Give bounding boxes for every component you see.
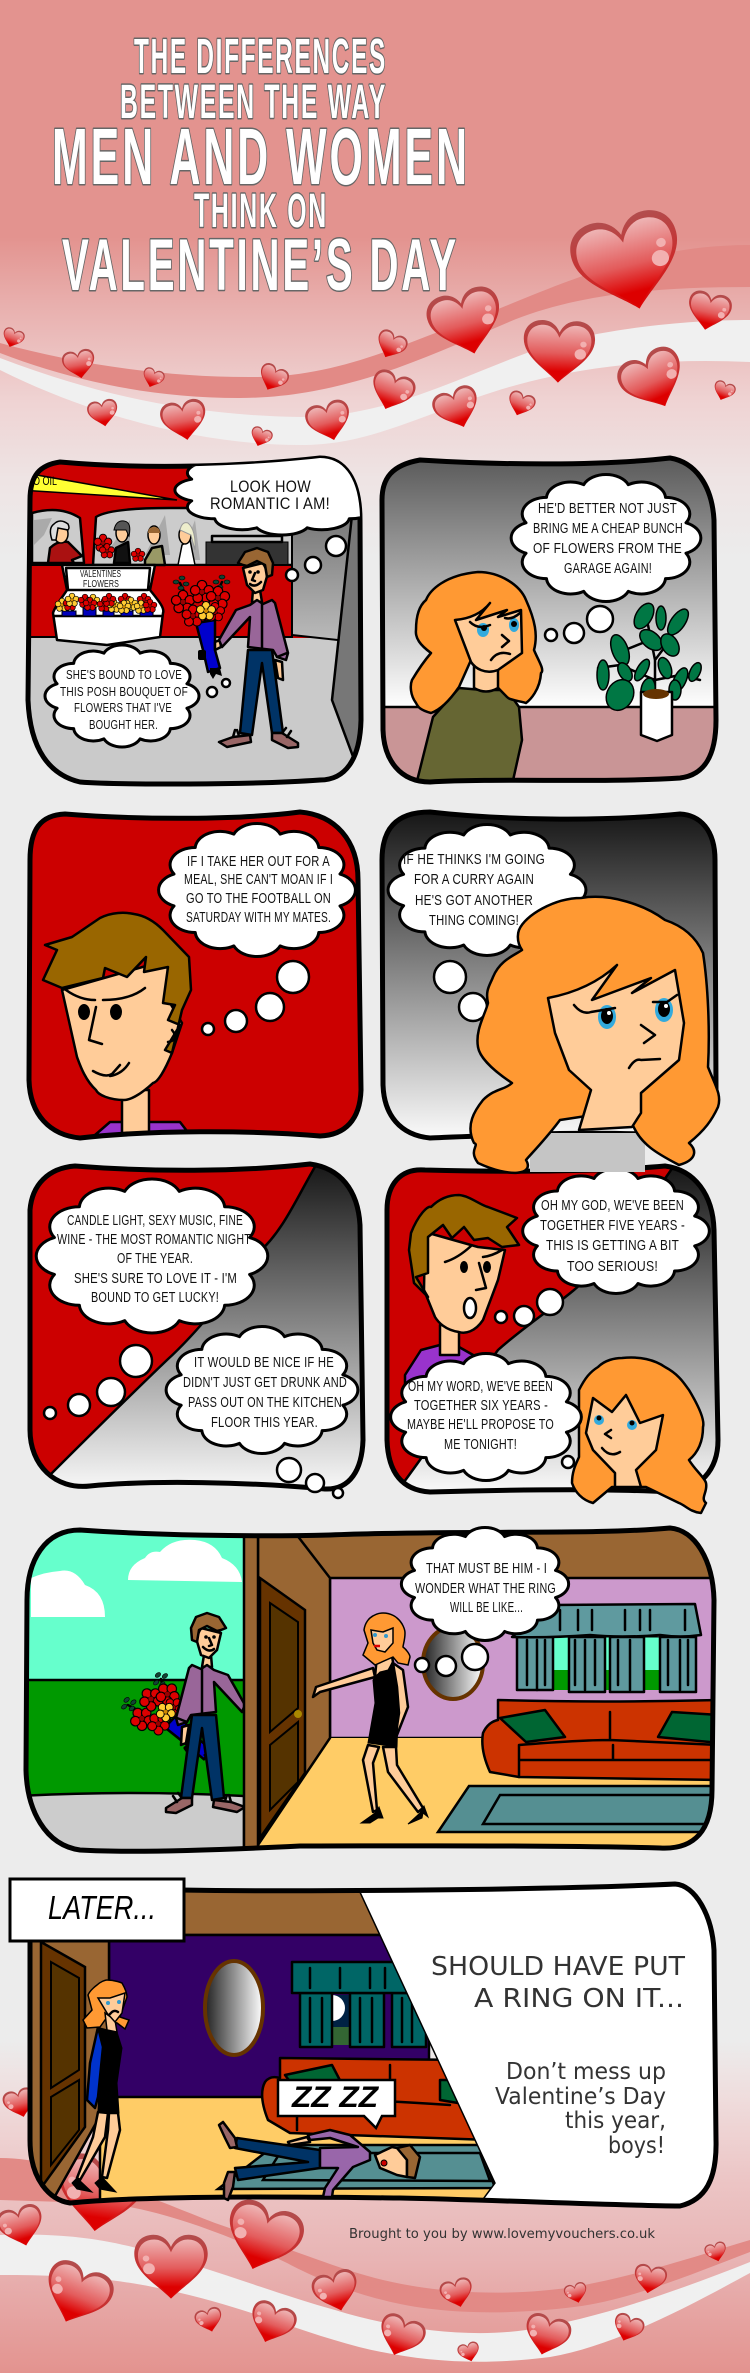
thought text: propose xyxy=(407,1378,554,1453)
thought text: propose: TOGETHER SIX YEARS - xyxy=(414,1397,548,1414)
title xyxy=(52,30,470,306)
bouquet behind back xyxy=(121,1672,206,1761)
thought text: candle light: BOUND TO GET LUCKY! xyxy=(91,1289,219,1306)
heading: should have put a ring on it: SHOULD HAVE PUT xyxy=(431,1952,685,1982)
icon: heart xyxy=(711,379,737,404)
thought text: the ring: THAT MUST BE HIM - I xyxy=(426,1560,547,1577)
panel 1: florist at the garage: O OIL xyxy=(33,474,57,488)
bouquet xyxy=(171,575,230,679)
icon: heart xyxy=(438,2275,476,2311)
title: THE DIFFERENCES xyxy=(134,30,387,84)
sleeping man xyxy=(219,2122,420,2200)
gray backdrop below neck xyxy=(530,1133,645,1172)
icon: heart xyxy=(632,2263,668,2296)
icon: heart xyxy=(140,366,166,391)
later caption box: LATER... xyxy=(48,1889,156,1926)
panel 1: florist at the garage xyxy=(26,456,364,786)
icon: heart xyxy=(134,2235,208,2299)
icon: heart xyxy=(563,2281,590,2306)
thought text: bound to love: BOUGHT HER. xyxy=(89,717,158,732)
thought text: propose: MAYBE HE'LL PROPOSE TO xyxy=(407,1416,554,1433)
panel 3 frame xyxy=(29,812,361,1138)
icon: heart xyxy=(254,361,291,396)
zz zz speech bubble xyxy=(278,2080,395,2128)
thought bubbles xyxy=(207,536,346,697)
thought text: propose: OH MY WORD, WE'VE BEEN xyxy=(408,1378,553,1395)
thought text: curry: IF HE THINKS I'M GOING xyxy=(403,851,545,868)
thought text: too serious: TOGETHER FIVE YEARS - xyxy=(540,1217,685,1234)
woman in shop window xyxy=(48,521,82,563)
heading: should have put a ring on it xyxy=(431,1952,685,2014)
text: don't mess up valentine's day: this year, xyxy=(565,2108,666,2134)
room xyxy=(32,1892,490,2198)
thought text: candle light: OF THE YEAR. xyxy=(117,1250,193,1267)
room walls and floor xyxy=(256,1525,720,1850)
panel 3: man thinking about football xyxy=(20,805,370,1145)
icon: heart xyxy=(248,425,274,450)
woman big head xyxy=(470,897,719,1173)
woman in black dress xyxy=(313,1613,428,1824)
thought text: football: MEAL, SHE CAN'T MOAN IF I xyxy=(184,871,333,888)
panel 6 frame xyxy=(387,1166,718,1492)
panel 5 frame xyxy=(30,1164,363,1489)
thought text: too serious: OH MY GOD, WE'VE BEEN xyxy=(541,1197,684,1214)
thought text: kitchen floor: FLOOR THIS YEAR. xyxy=(211,1414,318,1431)
icon: large heart xyxy=(564,204,692,322)
thought text: candle light: WINE - THE MOST ROMANTIC NIGHT xyxy=(57,1231,251,1248)
flower display stand: VALENTINES xyxy=(80,569,121,580)
rug xyxy=(438,1786,720,1832)
top hearts xyxy=(0,204,737,450)
thought text: cheap flowers: BRING ME A CHEAP BUNCH xyxy=(533,520,683,537)
icon: heart xyxy=(456,2340,482,2364)
thought text: the ring: WONDER WHAT THE RING xyxy=(415,1580,556,1597)
woman hopeful xyxy=(572,1357,706,1513)
thought text: cheap flowers: OF FLOWERS FROM THE xyxy=(533,540,682,557)
thought text: candle light xyxy=(57,1212,251,1306)
thought text: football: IF I TAKE HER OUT FOR A xyxy=(187,853,330,870)
thought text: propose: ME TONIGHT! xyxy=(444,1436,517,1453)
thought cloud: cheap flowers xyxy=(511,474,701,602)
icon: heart xyxy=(35,2255,119,2334)
icon: heart xyxy=(520,2310,574,2360)
panel 6: together five and six years xyxy=(380,1160,725,1513)
panel 4: woman thinking about curry xyxy=(375,805,725,1173)
woman hair and face xyxy=(411,572,542,713)
later caption box xyxy=(10,1879,184,1941)
thought bubbles xyxy=(434,961,487,1021)
top wave bands xyxy=(0,245,750,445)
thought bubbles xyxy=(44,1345,343,1498)
thought text: kitchen floor xyxy=(183,1354,347,1431)
icon: small heart behind panel xyxy=(1,2085,39,2121)
title: BETWEEN THE WAY xyxy=(120,76,387,129)
thought text: football: SATURDAY WITH MY MATES. xyxy=(186,909,331,926)
icon: heart xyxy=(612,341,695,420)
panel 8: later, man passed out xyxy=(10,1879,730,2215)
thought text: bound to love xyxy=(60,667,188,732)
thought text: cheap flowers: GARAGE AGAIN! xyxy=(564,560,652,577)
icon: heart xyxy=(217,2195,309,2281)
panel 7: woman answers door xyxy=(20,1525,720,1860)
man with bouquet xyxy=(215,548,298,748)
sofa xyxy=(482,1700,720,1780)
text: don't mess up valentine's day: Don’t mess up xyxy=(506,2059,666,2085)
thought bubbles xyxy=(495,1289,574,1468)
panel 2: woman and plant xyxy=(375,450,725,792)
text: don't mess up valentine's day: boys! xyxy=(608,2133,665,2159)
icon: heart xyxy=(0,2201,48,2251)
icon: heart xyxy=(303,397,355,446)
speech text: look how romantic: ROMANTIC I AM! xyxy=(210,494,330,513)
man head xyxy=(43,913,191,1100)
thought cloud: football xyxy=(159,824,355,956)
man head worried xyxy=(409,1195,519,1333)
icon: heart xyxy=(193,2305,225,2335)
panel 4 frame xyxy=(382,812,716,1138)
icon: heart xyxy=(504,389,538,420)
icon: heart xyxy=(703,2240,729,2264)
thought text: football xyxy=(184,853,333,926)
thought text: bound to love: SHE'S BOUND TO LOVE xyxy=(66,667,182,682)
text: don't mess up valentine's day: Valentine’s Day xyxy=(495,2084,666,2110)
rug xyxy=(218,2145,495,2189)
panel 7 frame xyxy=(26,1528,714,1851)
white clouds in the sky xyxy=(31,1540,242,1617)
thought text: curry: HE'S GOT ANOTHER xyxy=(415,892,533,909)
thought cloud: the ring xyxy=(401,1528,569,1640)
icon: heart xyxy=(372,327,410,364)
icon: heart xyxy=(522,319,596,384)
thought text: candle light: CANDLE LIGHT, SEXY MUSIC, FINE xyxy=(67,1212,243,1229)
icon: heart xyxy=(309,2266,363,2316)
icon: heart xyxy=(609,2311,647,2346)
icon: heart xyxy=(429,382,485,435)
thought cloud: candle light xyxy=(36,1179,268,1333)
thought text: the ring xyxy=(415,1560,556,1616)
thought cloud: look how romantic xyxy=(173,458,360,536)
flower display stand: FLOWERS xyxy=(83,579,119,590)
woman arms crossed xyxy=(72,1980,129,2192)
icon: heart xyxy=(373,2310,429,2363)
text: don't mess up valentine's day xyxy=(495,2059,666,2159)
white caption area xyxy=(359,1885,730,2215)
window and curtains xyxy=(292,1962,426,2047)
thought text: football: GO TO THE FOOTBALL ON xyxy=(186,890,331,907)
panel 1 frame xyxy=(28,458,361,784)
thought cloud: too serious xyxy=(523,1168,709,1294)
mirror xyxy=(423,1627,483,1699)
title: THINK ON xyxy=(194,185,328,238)
icon: heart xyxy=(244,2297,300,2350)
panel 2 frame xyxy=(382,458,716,782)
panel 8 frame xyxy=(30,1884,716,2206)
icon: heart xyxy=(365,366,419,416)
speech text: look how romantic xyxy=(210,477,330,513)
thought text: curry: FOR A CURRY AGAIN xyxy=(414,871,534,888)
icon: heart xyxy=(86,398,120,429)
thought text: the ring: WILL BE LIKE... xyxy=(450,1599,523,1616)
zz zz speech bubble: ZZ ZZ xyxy=(291,2081,380,2114)
thought cloud: curry xyxy=(388,824,586,956)
thought cloud: bound to love xyxy=(45,645,199,747)
icon: heart xyxy=(422,282,510,363)
heading: should have put a ring on it: A RING ON IT... xyxy=(474,1984,684,2014)
sofa xyxy=(262,2058,490,2140)
window and curtains xyxy=(512,1604,701,1692)
thought bubbles xyxy=(202,961,309,1035)
thought text: kitchen floor: IT WOULD BE NICE IF HE xyxy=(194,1354,334,1371)
icon: heart xyxy=(61,348,97,381)
mirror xyxy=(205,1961,263,2055)
bottom wave bands xyxy=(0,2158,750,2362)
thought text: candle light: SHE'S SURE TO LOVE IT - I'M xyxy=(74,1270,237,1287)
thought text: too serious: TOO SERIOUS! xyxy=(567,1258,658,1275)
bottom hearts xyxy=(0,2085,729,2364)
thought text: curry xyxy=(403,851,545,929)
thought text: too serious xyxy=(540,1197,685,1275)
icon: heart xyxy=(158,397,210,444)
thought bubbles xyxy=(545,606,613,643)
speech text: look how romantic: LOOK HOW xyxy=(230,477,311,496)
thought bubbles xyxy=(415,1644,488,1676)
door frame xyxy=(244,1525,258,1850)
footer credit: Brought to you by www.lovemyvouchers.co.uk xyxy=(349,2227,655,2242)
woman body xyxy=(416,688,522,785)
man arriving with flowers xyxy=(166,1613,249,1813)
thought cloud: propose xyxy=(391,1354,581,1480)
thought text: kitchen floor: DIDN'T JUST GET DRUNK AND xyxy=(183,1374,347,1391)
shop staff and customers xyxy=(94,521,195,565)
flower display stand xyxy=(53,565,163,645)
thought text: too serious: THIS IS GETTING A BIT xyxy=(546,1237,679,1254)
icon: heart xyxy=(684,289,734,334)
thought text: cheap flowers: HE'D BETTER NOT JUST xyxy=(538,500,677,517)
panel 5: candle light thoughts xyxy=(20,1155,370,1500)
thought text: kitchen floor: PASS OUT ON THE KITCHEN xyxy=(188,1394,342,1411)
icon: heart behind panel xyxy=(52,2151,148,2237)
thought text: curry: THING COMING! xyxy=(429,912,519,929)
sky, grass and pavement xyxy=(20,1525,244,1860)
thought text: bound to love: THIS POSH BOUQUET OF xyxy=(60,684,188,699)
thought text: bound to love: FLOWERS THAT I'VE xyxy=(74,700,172,715)
plant xyxy=(597,600,704,741)
icon: heart xyxy=(0,326,26,351)
thought text: cheap flowers xyxy=(533,500,683,577)
thought cloud: kitchen floor xyxy=(166,1326,358,1454)
